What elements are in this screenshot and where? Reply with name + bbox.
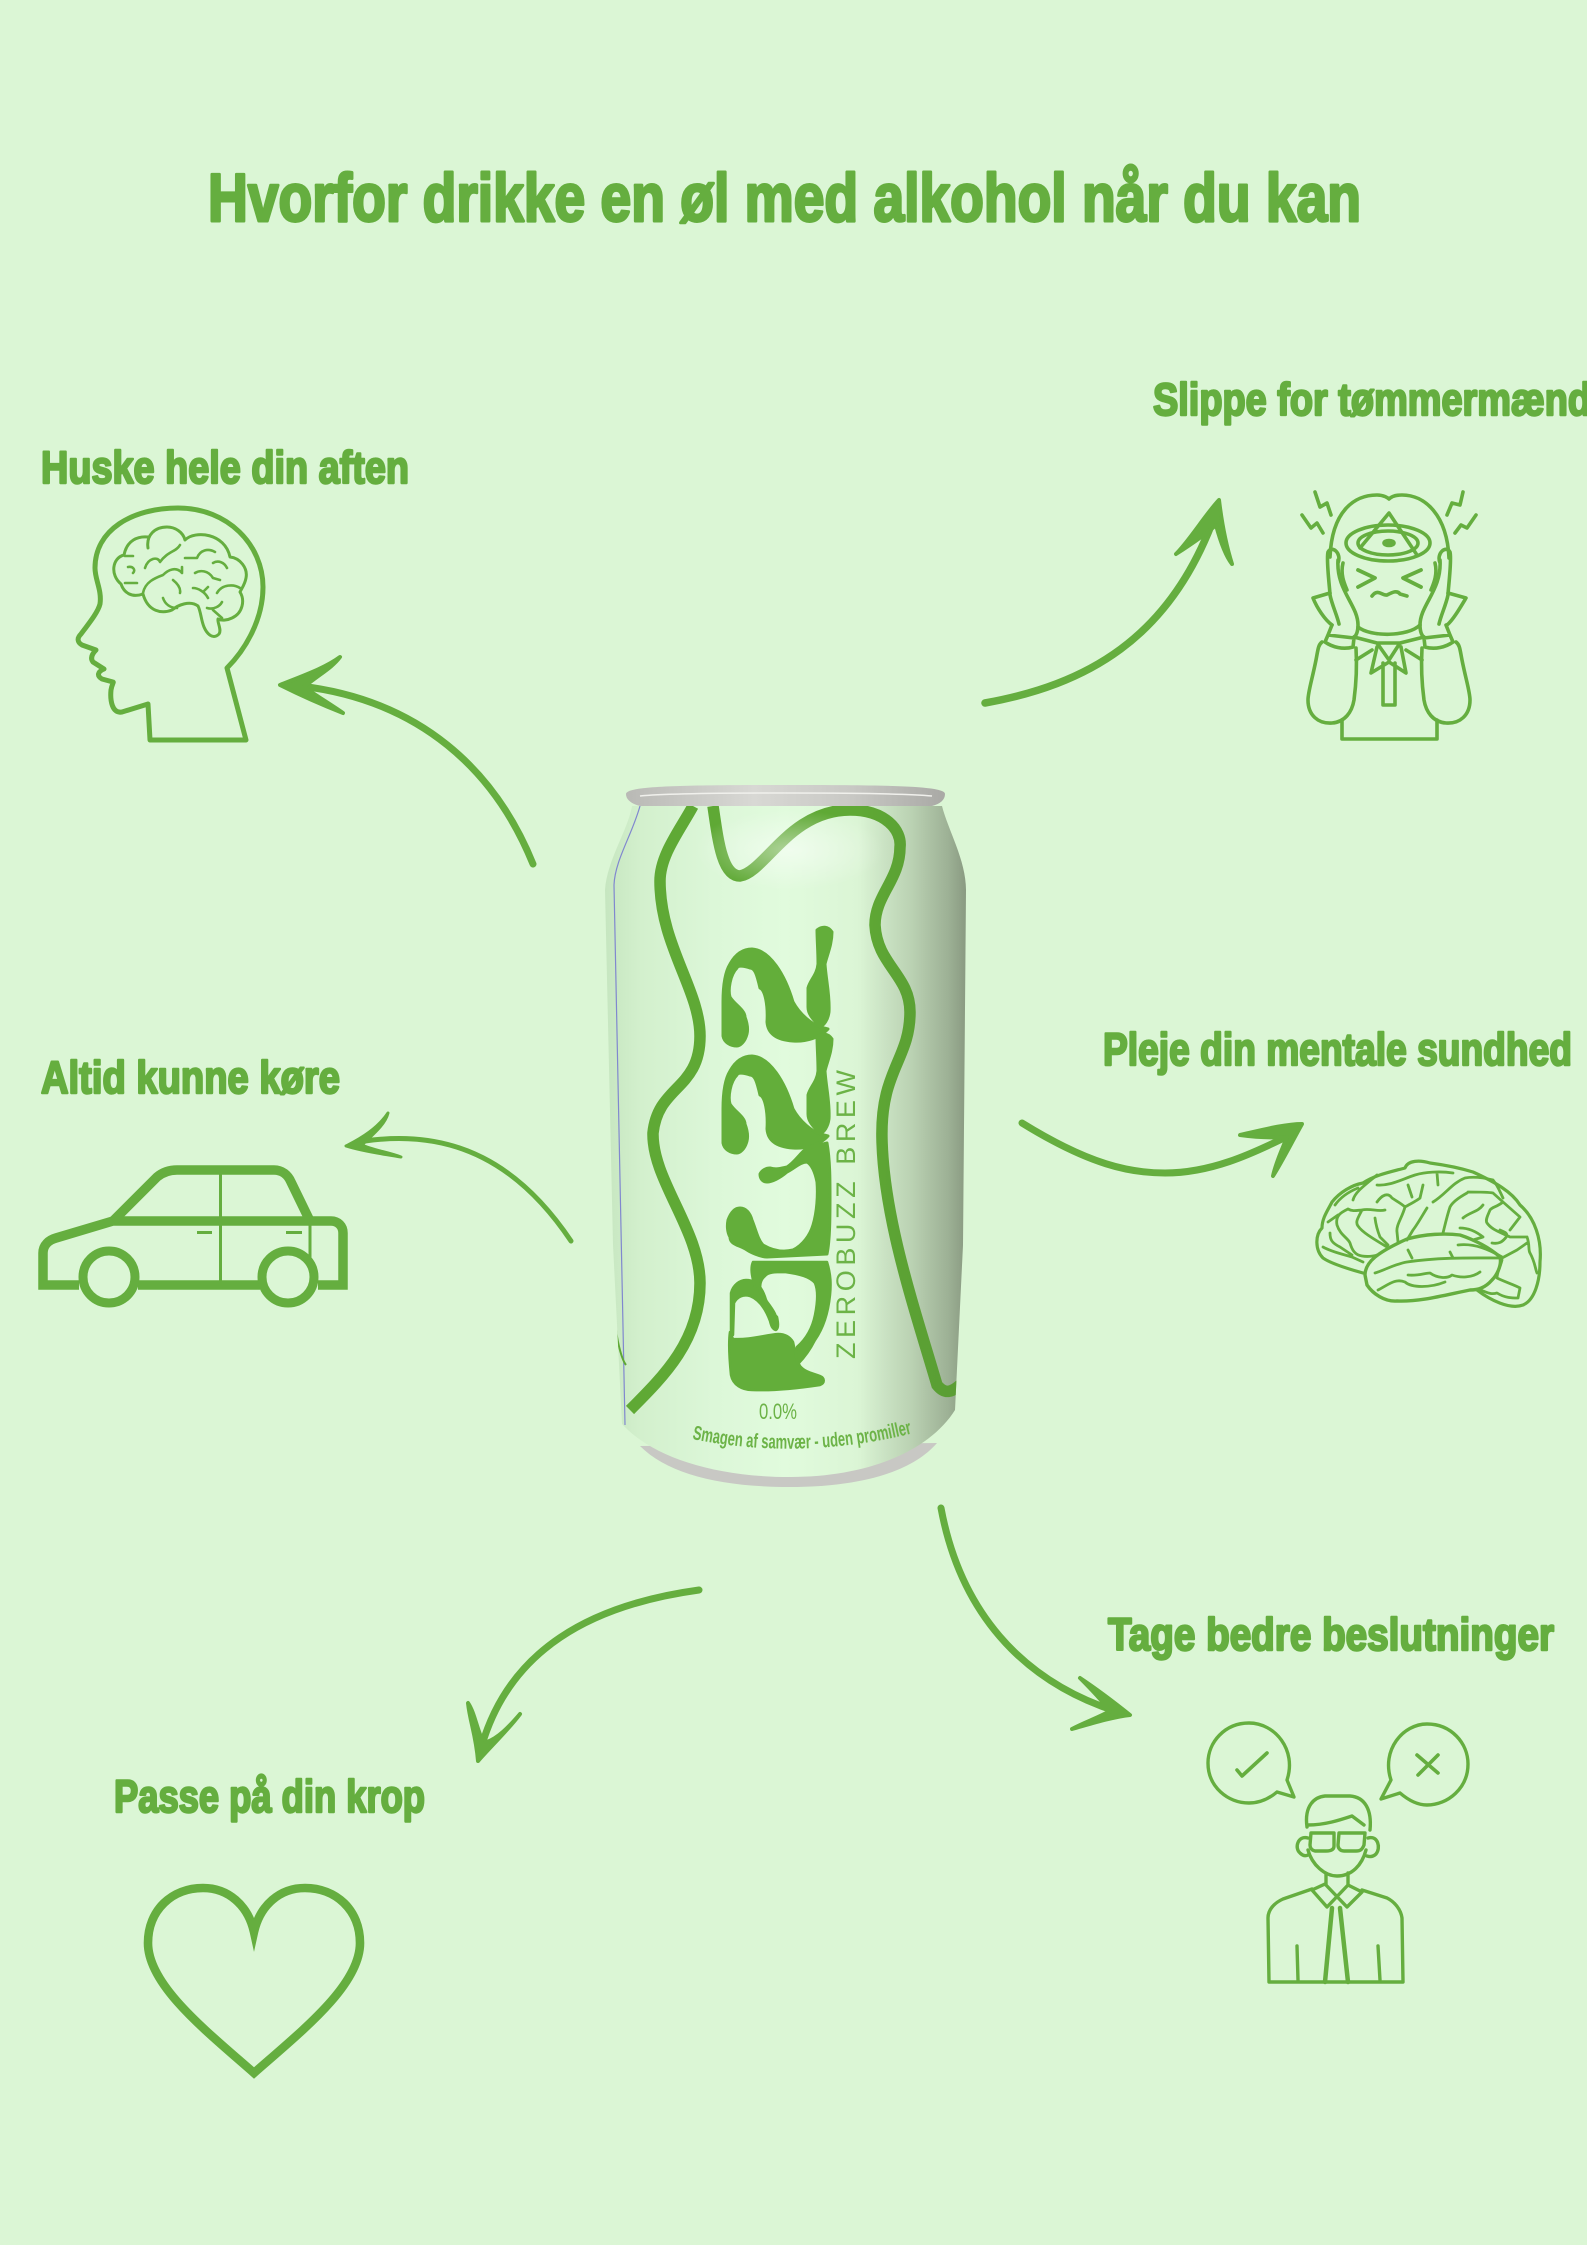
alcohol percentage: 0.0% — [759, 1399, 797, 1424]
tagline: Smagen af samvær - uden promiller — [693, 1422, 910, 1449]
shading — [896, 806, 966, 1456]
check mark — [1237, 1753, 1267, 1776]
car body — [43, 1221, 343, 1285]
hair — [1330, 495, 1449, 558]
halo — [1346, 525, 1430, 561]
torso — [1342, 720, 1437, 739]
icon: heart — [148, 1888, 360, 2073]
can top rim — [626, 785, 945, 806]
brain outline — [1317, 1161, 1540, 1306]
arrow: can to mental health icon — [1022, 1123, 1302, 1176]
car roof — [113, 1170, 309, 1221]
temporal lobe — [1365, 1234, 1500, 1301]
doors and handles — [197, 1171, 310, 1285]
neck and collar — [1312, 1873, 1362, 1907]
right sleeve — [1422, 642, 1470, 723]
arrow: can to car icon — [346, 1113, 571, 1241]
rear wheel — [262, 1251, 314, 1303]
icon: head with brain — [78, 508, 263, 740]
beer can — [605, 785, 966, 1487]
logo: letter U — [727, 1143, 830, 1257]
title: Hvorfor drikke en øl med alkohol når du kan — [208, 160, 1361, 236]
sleeve lines — [1297, 1946, 1380, 1980]
arrow: can to hangover icon — [985, 500, 1232, 703]
label: Altid kunne køre: Altid kunne køre — [41, 1052, 340, 1103]
seam — [614, 806, 640, 1425]
small left line — [616, 1330, 626, 1365]
can artwork — [613, 806, 966, 1456]
hair wings — [1313, 593, 1466, 625]
arrow: can to head icon — [280, 657, 533, 864]
icon: person with hangover — [1302, 492, 1476, 739]
check bubble — [1208, 1723, 1294, 1803]
brain outline — [114, 527, 246, 636]
ears — [1297, 1838, 1378, 1857]
front wheel — [83, 1251, 135, 1303]
logo: letter Z top — [723, 927, 832, 1046]
left hand — [1327, 549, 1358, 637]
shoulders and torso — [1268, 1889, 1403, 1982]
tie — [1325, 1908, 1348, 1982]
logo: letter B — [729, 1262, 831, 1390]
cross mark — [1417, 1755, 1438, 1775]
label: Huske hele din aften: Huske hele din aften — [41, 442, 409, 493]
folds — [1323, 1172, 1537, 1298]
cone — [1360, 513, 1417, 555]
can body — [605, 806, 966, 1477]
left wavy line — [630, 806, 700, 1410]
arrow: can to decisions icon — [941, 1508, 1130, 1729]
center and right wavy line — [713, 806, 960, 1391]
brain folds — [125, 545, 240, 618]
icon: man deciding — [1208, 1723, 1468, 1982]
head outline — [78, 508, 263, 740]
cuffs — [1325, 625, 1453, 648]
label: Passe på din krop: Passe på din krop — [114, 1771, 425, 1822]
brand text: ZEROBUZZ BREW — [831, 1069, 861, 1359]
lightning — [1302, 492, 1476, 533]
icon: car — [43, 1170, 343, 1303]
can bottom rim — [640, 1443, 937, 1487]
left sleeve — [1308, 642, 1356, 723]
cross bubble — [1381, 1724, 1468, 1805]
icon: brain — [1317, 1161, 1540, 1306]
head — [1306, 1796, 1370, 1876]
face — [1342, 563, 1436, 634]
eyes — [1358, 570, 1421, 587]
arrow: can to heart icon — [468, 1590, 699, 1761]
mouth — [1372, 592, 1407, 596]
top highlight — [712, 814, 846, 881]
collar and tie — [1354, 637, 1424, 705]
logo: letter Z second — [723, 1034, 832, 1153]
right hand — [1420, 549, 1451, 637]
glasses — [1310, 1833, 1365, 1851]
